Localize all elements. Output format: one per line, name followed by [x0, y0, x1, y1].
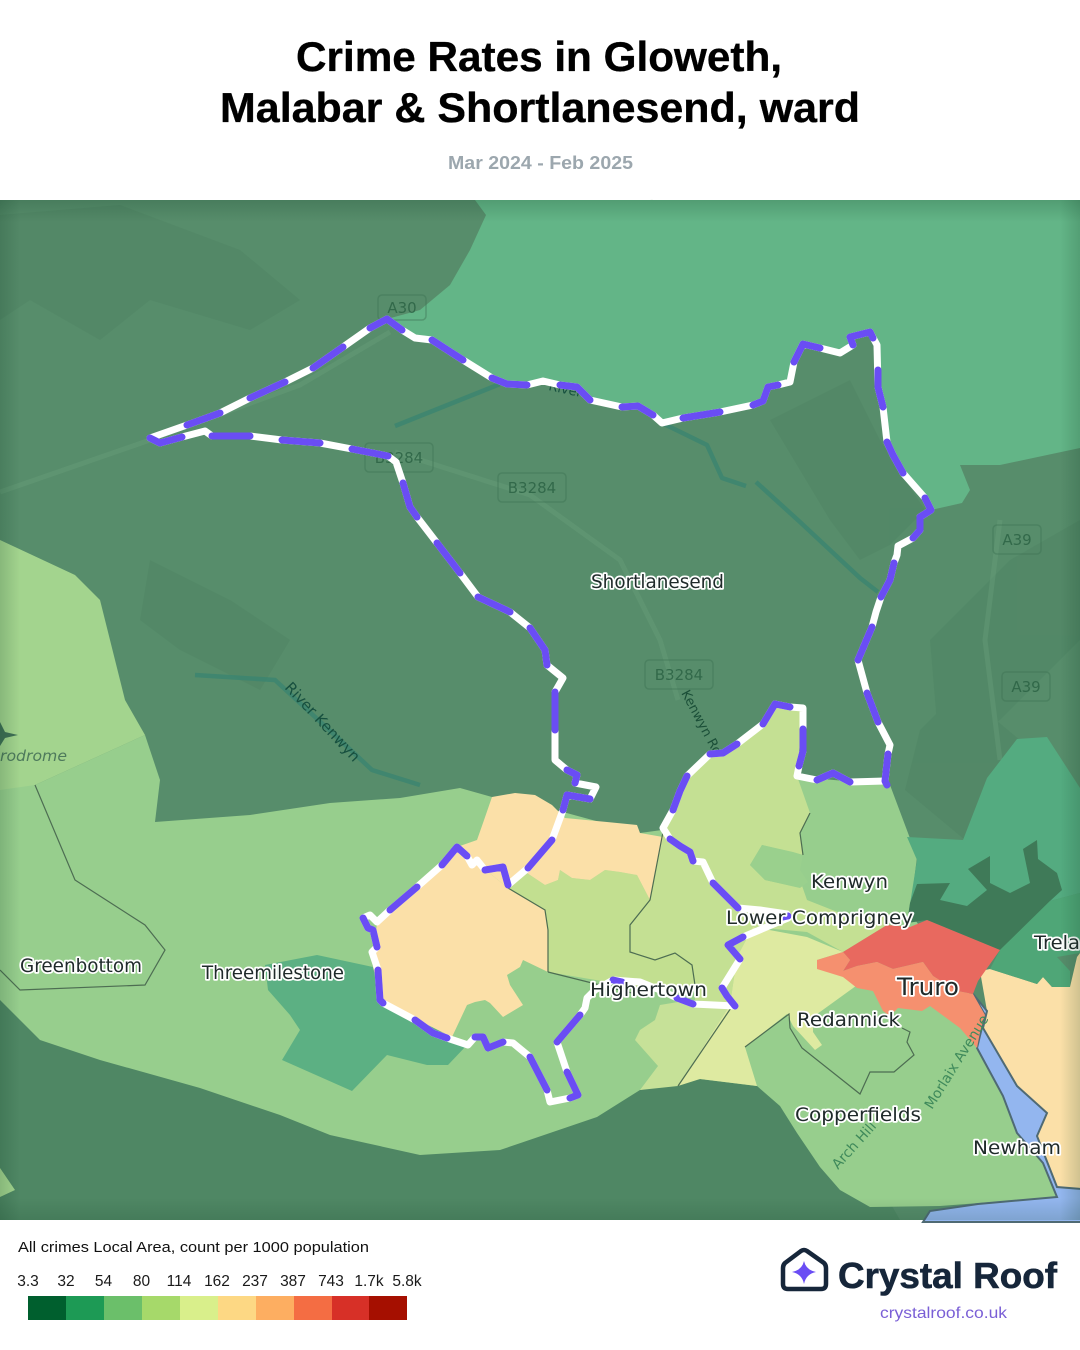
legend values: 1.7k [354, 1273, 384, 1290]
road shields: A39 [1002, 531, 1032, 549]
legend [17, 1239, 422, 1320]
legend values [17, 1273, 422, 1290]
subtitle: date range: Mar 2024 - Feb 2025 [448, 153, 633, 173]
place name labels [20, 571, 1080, 1159]
icon: house with star [783, 1250, 826, 1289]
logo wordmark: Crystal Roof [838, 1255, 1058, 1296]
road shields: B3284 [508, 479, 556, 497]
region: eastern dense dark green [907, 840, 1062, 950]
region: north-centre yellow green [630, 704, 905, 1005]
legend values: 237 [242, 1273, 268, 1290]
legend values: 162 [204, 1273, 230, 1290]
legend colour scale [28, 1296, 407, 1320]
place name labels: Copperfields [795, 1104, 921, 1126]
map: faint roads [0, 200, 1000, 760]
place name labels: Trela [1033, 932, 1080, 954]
region: Truro red [843, 920, 1000, 994]
place name labels: Kenwyn [811, 871, 888, 893]
ward boundary: white base line [150, 319, 931, 1102]
place name labels: Truro [896, 973, 959, 1001]
street and river labels: River Kenwyn [281, 678, 364, 765]
road shields: A30 [387, 299, 417, 317]
website url: crystalroof.co.uk [880, 1305, 1008, 1322]
legend title: All crimes Local Area, count per 1000 population [18, 1239, 369, 1256]
region: south-western pale sliver [0, 1168, 15, 1197]
road shields: B3284 [655, 666, 703, 684]
place name labels: Greenbottom [20, 955, 142, 977]
region: pale yellow centre [678, 927, 860, 1086]
map: rivers [195, 384, 878, 785]
region: Kenwyn patch [750, 845, 808, 888]
place name labels: Threemilestone [201, 962, 344, 984]
place name labels: Highertown [590, 979, 707, 1001]
region: southern yellow green [635, 1000, 730, 1090]
region: western pale green [0, 540, 145, 790]
title: Crime Rates in Gloweth, [296, 33, 782, 80]
ward boundary: purple dashes [150, 319, 931, 1098]
street and river labels: Kenwyn Ro [677, 688, 724, 758]
street and river labels [281, 379, 992, 1173]
map: southern dark woodland [0, 980, 900, 1220]
place name labels: Lower Comprigney [726, 907, 913, 929]
region: Truro salmon [817, 952, 985, 1048]
legend values: 80 [133, 1273, 150, 1290]
street and river labels: Morlaix Avenue [922, 1012, 992, 1112]
region: urban band light green [0, 735, 1057, 1207]
legend values: 54 [95, 1273, 112, 1290]
region: Threemilestone south teal [265, 955, 467, 1091]
map: darker woodland patches [0, 205, 1080, 840]
street and river labels: Arch Hill [829, 1119, 880, 1173]
map: thin ward outlines [0, 785, 914, 1094]
region: north orange [457, 793, 663, 900]
choropleth map [0, 200, 1080, 1222]
region: river estuary [923, 994, 1080, 1222]
legend values: 114 [167, 1273, 192, 1290]
road shields: B3284 [375, 449, 423, 467]
legend values: 387 [280, 1273, 306, 1290]
region: east orange [980, 953, 1080, 1189]
region: east teal [907, 737, 1080, 950]
region: west orange [373, 847, 548, 1037]
region: centre yellow green [508, 870, 695, 990]
place name labels: Shortlanesend [591, 571, 724, 593]
region: Trelander teal [990, 893, 1080, 987]
aerodrome label and icon [0, 722, 67, 765]
legend values: 3.3 [17, 1273, 39, 1290]
legend values: 743 [318, 1273, 344, 1290]
region: northern green area [387, 200, 1080, 510]
logo: Crystal Roof [783, 1250, 1058, 1322]
road shields [365, 295, 1050, 701]
road shields: A39 [1011, 678, 1041, 696]
title: Malabar & Shortlanesend, ward [220, 84, 860, 131]
aerodrome label and icon: rodrome [0, 747, 67, 765]
legend values: 32 [57, 1273, 75, 1290]
title [220, 33, 860, 131]
place name labels: Redannick [797, 1009, 900, 1031]
street and river labels: River [547, 379, 584, 401]
map base: low crime dark green [0, 200, 1080, 1220]
place name labels: Newham [973, 1137, 1061, 1159]
map edge vignette [0, 200, 1080, 1220]
legend values: 5.8k [392, 1273, 422, 1290]
